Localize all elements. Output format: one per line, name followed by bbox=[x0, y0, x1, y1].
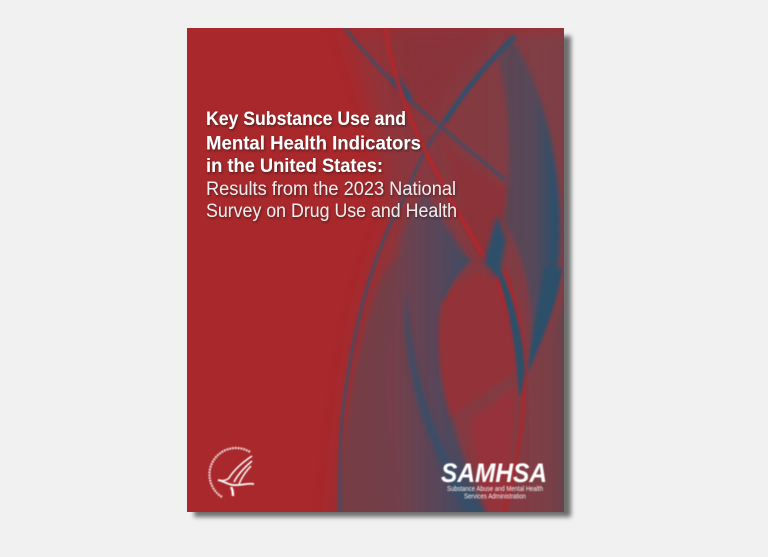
cover drop shadow bbox=[194, 36, 571, 517]
dark central column bbox=[385, 191, 488, 512]
thin diagonal dark ribbons bbox=[345, 28, 505, 180]
SAMHSA logo: Services Administration bbox=[464, 494, 526, 500]
central blue ribbon bbox=[405, 290, 490, 520]
title bold lines: Mental Health Indicators bbox=[206, 134, 421, 154]
big right arc band bbox=[498, 35, 560, 372]
red wedge below crossing bbox=[456, 158, 504, 248]
wedge on the right bbox=[528, 268, 562, 372]
subtitle lines: Results from the 2023 National bbox=[206, 179, 456, 200]
subtitle lines: Survey on Drug Use and Health bbox=[206, 201, 457, 222]
subtitle lines bbox=[206, 179, 457, 222]
seal ring bbox=[209, 448, 250, 497]
dark curve beside lens bbox=[495, 262, 524, 395]
SAMHSA logo bbox=[441, 458, 547, 500]
title bbox=[206, 109, 457, 222]
title bold lines bbox=[206, 109, 421, 177]
title bold lines: Key Substance Use and bbox=[206, 109, 406, 130]
SAMHSA wordmark: SAMHSA bbox=[441, 458, 547, 488]
title bold lines: in the United States: bbox=[206, 156, 383, 177]
bottom right veil bbox=[551, 299, 564, 512]
left lower veil bbox=[335, 264, 394, 512]
lower fan of red bbox=[470, 385, 515, 520]
thin curve atop lens bbox=[443, 258, 470, 300]
lens of red in centre bbox=[440, 272, 518, 418]
red streaks bbox=[385, 28, 510, 320]
cover panel bbox=[187, 28, 580, 530]
abstract ribbon artwork bbox=[332, 28, 564, 512]
report cover illustration bbox=[187, 28, 574, 520]
HHS seal logo bbox=[209, 448, 254, 497]
eagle icon bbox=[218, 456, 254, 496]
SAMHSA full name: Substance Abuse and Mental Health bbox=[447, 486, 543, 493]
